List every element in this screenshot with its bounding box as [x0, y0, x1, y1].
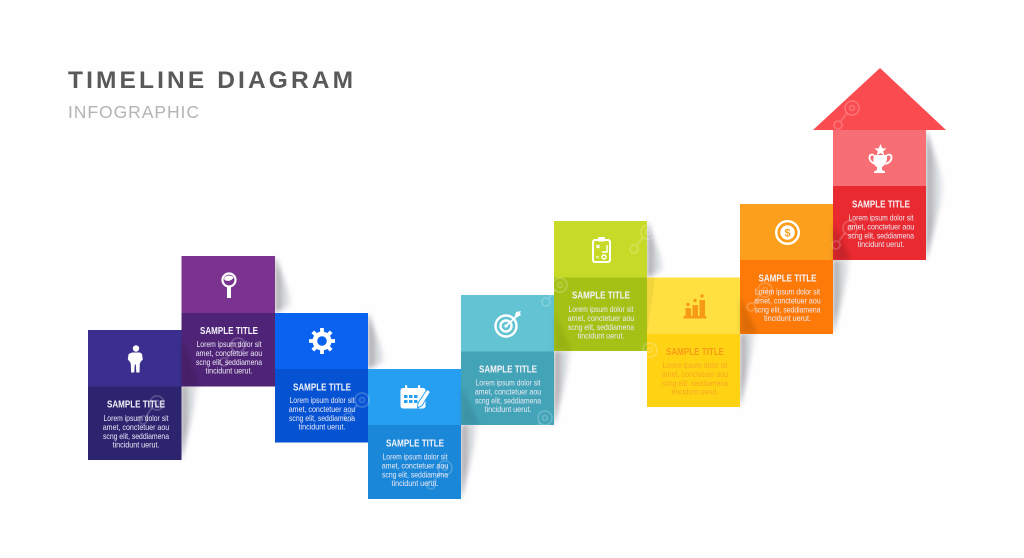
heading: SAMPLE TITLE — [666, 347, 724, 358]
text block: amet, conctetuer aou — [382, 460, 449, 470]
text block: tincidunt uerut. — [764, 313, 811, 323]
title: TIMELINE DIAGRAM — [68, 67, 353, 94]
text block: tincidunt uerut. — [206, 366, 252, 376]
text block: amet, conctetuer aou — [196, 348, 263, 358]
watermarks — [139, 101, 859, 489]
text block — [475, 378, 542, 414]
icon: bar chart — [684, 294, 706, 318]
panel: step 8 — [740, 204, 833, 334]
text block: scng elit, seddiamena — [196, 357, 262, 367]
text block: Lorem ipsum dolor sit — [476, 378, 541, 388]
text block: scng elit, seddiamena — [848, 230, 914, 240]
text block: Lorem ipsum dolor sit — [848, 212, 914, 222]
subtitle: INFOGRAPHIC — [68, 102, 199, 122]
icon: magnifier — [222, 274, 236, 298]
text block: Lorem ipsum dolor sit — [568, 304, 634, 314]
icon: trophy — [870, 144, 892, 173]
panel: step 2 — [182, 256, 275, 386]
heading: SAMPLE TITLE — [572, 290, 630, 302]
heading: SAMPLE TITLE — [852, 200, 910, 210]
heading: SAMPLE TITLE — [758, 274, 817, 284]
text block: amet, conctetuer aou — [754, 296, 821, 306]
text block: amet, conctetuer aou — [289, 404, 356, 414]
heading: SAMPLE TITLE — [293, 382, 351, 394]
text block: Lorem ipsum dolor sit — [104, 413, 169, 423]
panel: step 9 with arrow — [813, 68, 946, 260]
text block — [289, 395, 356, 432]
icon: gear — [309, 328, 335, 354]
panel: step 4 — [368, 369, 461, 499]
text block: tincidunt uerut. — [858, 239, 904, 249]
icon: coin: $ — [784, 228, 791, 240]
text block: amet, conctetuer aou — [662, 369, 729, 379]
text block: tincidunt uerut. — [672, 386, 718, 396]
text block — [382, 452, 449, 488]
icon: target — [496, 311, 521, 336]
text block: Lorem ipsum dolor sit — [196, 339, 262, 349]
text block — [568, 304, 635, 340]
text block: amet, conctetuer aou — [848, 222, 915, 232]
text block: Lorem ipsum dolor sit — [755, 286, 821, 296]
heading: SAMPLE TITLE — [200, 326, 258, 337]
text block: tincidunt uerut. — [392, 478, 438, 488]
text block: Lorem ipsum dolor sit — [290, 395, 355, 405]
text block: Lorem ipsum dolor sit — [382, 452, 448, 462]
panel: step 3 — [275, 313, 368, 442]
panel: step 5 — [461, 295, 554, 425]
text block: tincidunt uerut. — [112, 440, 160, 450]
icon: person — [128, 345, 143, 372]
text block: amet, conctetuer aou — [568, 313, 635, 323]
panel: shadows — [181, 130, 945, 499]
text block: scng elit, seddiamena — [754, 304, 821, 314]
text block: Lorem ipsum dolor sit — [662, 360, 728, 370]
text block — [848, 212, 915, 249]
panel: step 1 — [88, 330, 182, 460]
panel: step 7 — [647, 278, 740, 407]
text block: tincidunt uerut. — [484, 404, 532, 414]
text block — [196, 339, 263, 376]
text block: scng elit, seddiamena — [568, 322, 634, 332]
panel: step 6 — [554, 221, 647, 351]
text block: tincidunt uerut. — [578, 330, 624, 340]
heading: SAMPLE TITLE — [107, 400, 165, 410]
text block: amet, conctetuer aou — [475, 386, 542, 396]
icon: clipboard — [593, 237, 610, 262]
text block — [662, 360, 729, 396]
text block: scng elit, seddiamena — [662, 378, 728, 388]
text block: scng elit, seddiamena — [103, 431, 169, 441]
text block: scng elit, seddiamena — [475, 396, 541, 406]
icon: calendar — [400, 385, 430, 408]
heading: SAMPLE TITLE — [479, 364, 537, 376]
text block: scng elit, seddiamena — [382, 470, 448, 480]
text block: amet, conctetuer aou — [103, 422, 170, 432]
text block: tincidunt uerut. — [298, 422, 346, 432]
heading: SAMPLE TITLE — [386, 438, 444, 450]
arrow head — [813, 68, 946, 130]
text block — [103, 413, 170, 450]
text block: scng elit, seddiamena — [289, 413, 355, 423]
text block — [754, 286, 821, 323]
